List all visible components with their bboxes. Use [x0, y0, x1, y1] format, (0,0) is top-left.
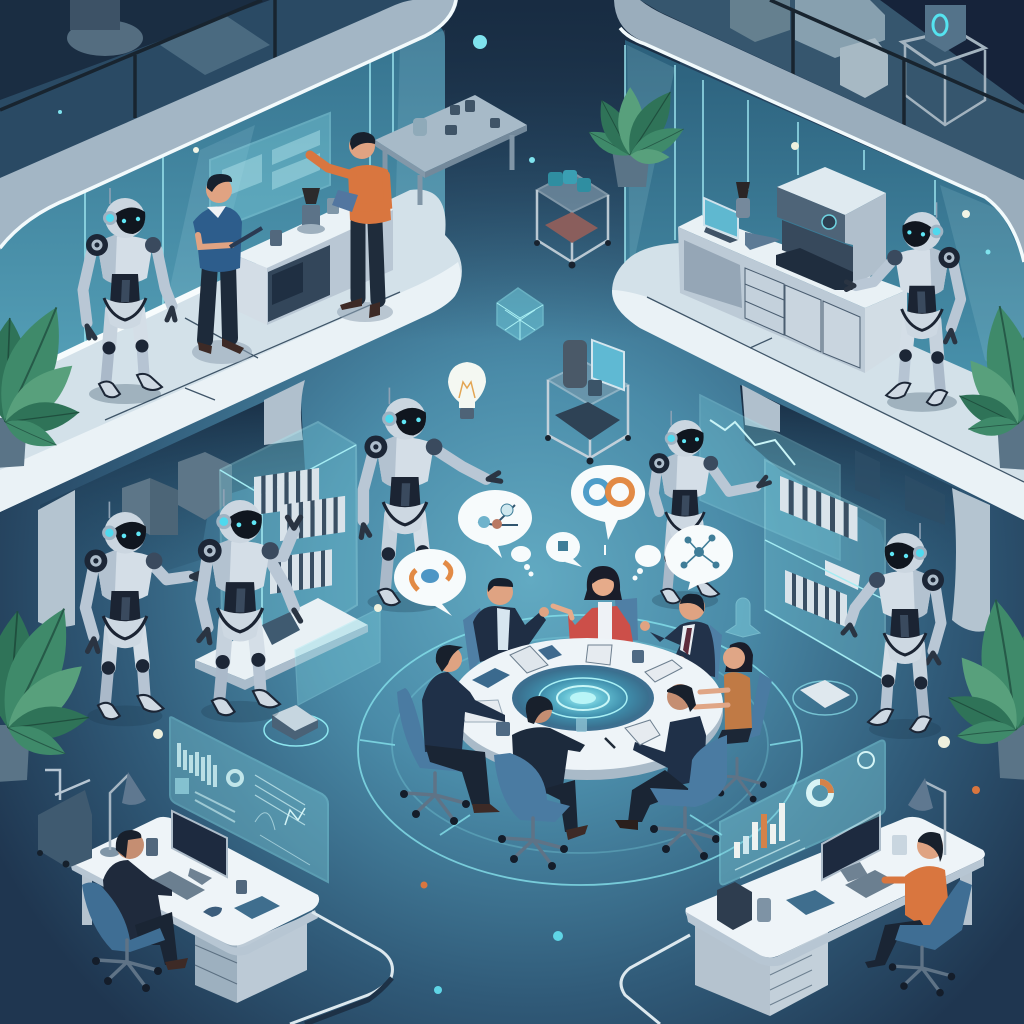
printer device	[717, 882, 752, 930]
man top left	[473, 578, 549, 664]
chair: front	[494, 753, 570, 822]
monitor right	[822, 812, 880, 880]
robot: upper left	[83, 188, 175, 404]
upper floor dark area	[0, 0, 430, 180]
robot: lower right	[843, 523, 944, 739]
stack of books on floor	[264, 705, 328, 746]
left side trolley	[37, 770, 92, 868]
chair: top centre	[615, 598, 638, 642]
man top right	[640, 594, 715, 677]
plant: top right	[954, 302, 1024, 470]
upper-left platform	[0, 0, 462, 512]
chair base right	[707, 758, 767, 802]
storage boxes left	[122, 452, 232, 535]
chair right desk	[895, 880, 972, 950]
speech bubble: nodes	[665, 525, 733, 590]
chair: top right	[705, 625, 722, 680]
column right back	[742, 385, 780, 432]
upper rail left	[0, 0, 275, 118]
woman right	[695, 642, 753, 745]
robot: centre left reaching	[361, 388, 501, 612]
pedestal	[195, 925, 237, 1003]
right floor outline	[621, 935, 690, 1024]
holographic panel behind counter	[210, 113, 330, 232]
glass wall left	[0, 24, 445, 440]
centre back potted plant	[584, 83, 688, 187]
floating cube	[497, 288, 543, 340]
lamp right	[925, 782, 945, 855]
monitor	[172, 811, 227, 877]
chair: right	[722, 672, 772, 745]
left desk worker	[82, 830, 188, 992]
meeting table group	[397, 566, 772, 870]
floor: upper centre dark zone	[380, 0, 680, 340]
small stacked device near shelf	[726, 598, 760, 637]
floor slab right	[612, 243, 1024, 520]
man left	[422, 645, 505, 813]
chair base front	[498, 818, 568, 870]
speech bubble: large top infinity rings	[571, 465, 645, 540]
man front right	[615, 684, 706, 830]
upper centre table	[375, 95, 527, 205]
holo chart right	[700, 395, 840, 560]
right holographic dashboard	[720, 740, 885, 884]
upper floor right	[640, 0, 1024, 180]
lamp	[100, 772, 146, 857]
column left	[38, 490, 75, 627]
column right	[952, 488, 990, 632]
person: man in orange sweater	[310, 132, 393, 322]
right desk	[686, 778, 985, 1016]
ceiling band	[0, 0, 458, 250]
plant: bottom right	[943, 595, 1024, 780]
chair: left	[397, 688, 467, 772]
under-platform wall left	[38, 380, 305, 627]
person: man in blue polo	[192, 174, 262, 364]
table centre disc	[512, 665, 654, 731]
right desk worker	[865, 832, 972, 996]
keyboard	[152, 871, 205, 900]
speech bubble: orange arcs	[394, 549, 466, 616]
cart with cyan device	[902, 5, 985, 125]
man front centre	[512, 696, 588, 840]
upper level furniture right	[730, 0, 985, 125]
floor slab	[0, 190, 462, 512]
wall screens	[855, 450, 945, 525]
light bulb icon	[448, 362, 486, 419]
robot: lower left	[84, 502, 202, 726]
column left back	[264, 380, 305, 445]
table	[451, 638, 723, 780]
keyboard right	[845, 870, 897, 898]
thought bubbles	[511, 545, 661, 580]
ceiling band right	[614, 0, 1024, 258]
coffee machine	[776, 167, 886, 290]
papers and tablets	[510, 646, 548, 673]
chair left desk	[82, 882, 165, 952]
right floor tray	[793, 680, 857, 715]
chair base front right	[650, 808, 720, 860]
plant: top left	[0, 299, 82, 468]
laptop and grinder on counter	[704, 182, 780, 250]
under-platform wall right	[740, 385, 990, 632]
plant: bottom left	[0, 599, 91, 782]
upper-right platform	[612, 0, 1024, 520]
counter left	[235, 188, 393, 325]
cart upper	[534, 170, 611, 268]
left desk	[70, 772, 319, 1003]
floor rings around meeting table	[358, 615, 802, 885]
speech bubble: network sketch	[458, 490, 532, 558]
chair: front right	[650, 735, 727, 807]
counter right	[678, 215, 907, 373]
left floor outline	[290, 912, 392, 1024]
speech bubble: small thought	[546, 532, 582, 567]
cart centre	[545, 340, 631, 464]
upper level furniture	[67, 0, 270, 75]
robot: by shelf	[198, 489, 300, 722]
upper rail right	[770, 0, 1024, 125]
glass shelf left	[195, 422, 380, 705]
glass shelf right with holo chart	[700, 395, 885, 680]
chair base left	[400, 773, 470, 825]
left holographic dashboard	[170, 717, 328, 882]
woman top centre	[553, 566, 633, 650]
robot: centre right reaching	[649, 411, 770, 610]
shelf base	[195, 598, 368, 680]
robot: upper right	[846, 202, 961, 412]
glass wall right	[625, 40, 1024, 400]
chair: top left	[463, 608, 490, 672]
holo chart	[295, 608, 380, 705]
